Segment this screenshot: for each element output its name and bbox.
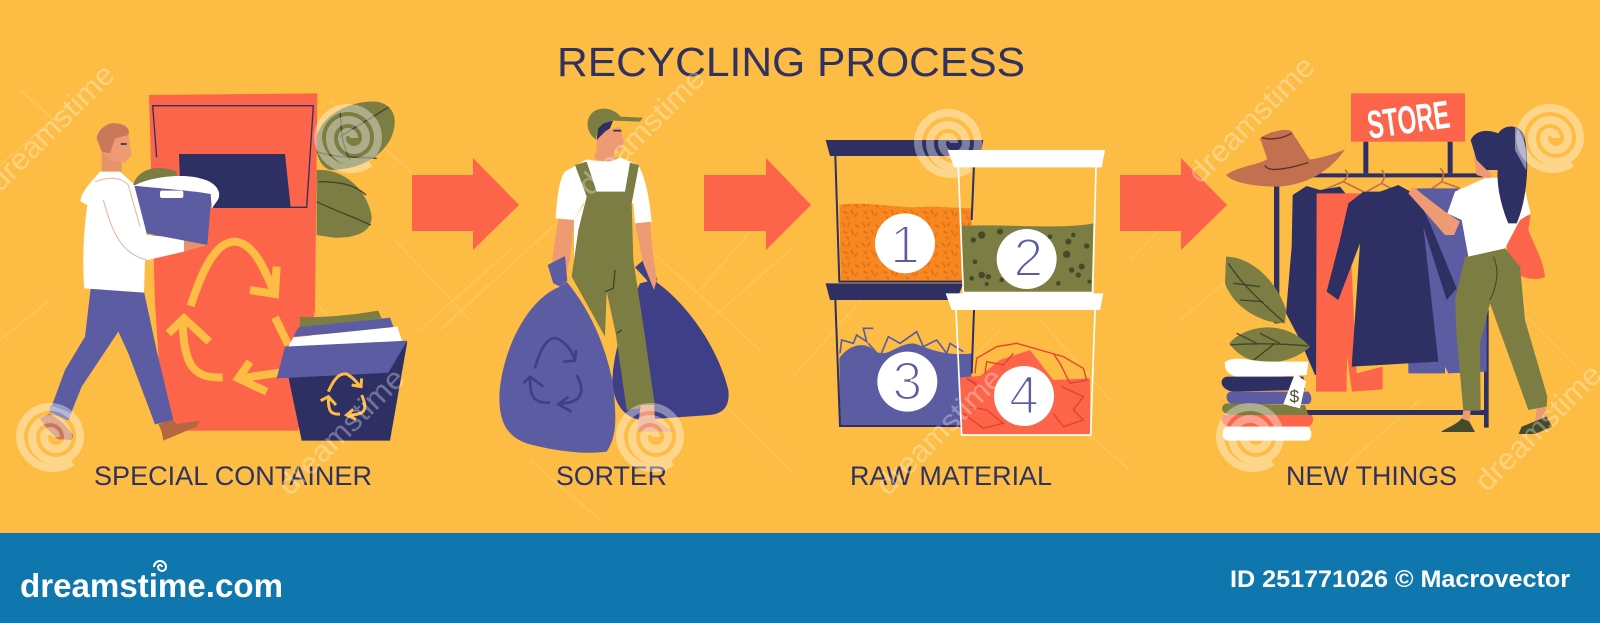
arrow 3: [1120, 158, 1227, 250]
bag recycling symbol: [523, 338, 581, 412]
label: special container: SPECIAL CONTAINER: [94, 461, 372, 491]
recycling bin with clothes: [277, 311, 407, 441]
stack of clothes: $: [1290, 387, 1300, 407]
stack of clothes: [1222, 359, 1313, 441]
container 3: [826, 283, 974, 426]
label: raw material: RAW MATERIAL: [850, 461, 1052, 491]
container 3: 3: [892, 352, 922, 411]
footer banner: [0, 533, 1600, 623]
container 1: [826, 140, 983, 282]
panel: raw material: [826, 140, 1105, 435]
sorter worker: [552, 109, 673, 432]
watermarks: dreamstime: [272, 362, 412, 502]
label: sorter: SORTER: [556, 461, 667, 491]
title: RECYCLING PROCESS: [557, 39, 1025, 85]
man carrying box: [40, 123, 219, 441]
arrow 1: [412, 158, 519, 250]
container 1: 1: [890, 216, 920, 275]
price tag: [1283, 373, 1306, 408]
label: new things: NEW THINGS: [1286, 461, 1457, 491]
front garbage bag: [499, 256, 615, 453]
plant leaves: [316, 102, 395, 238]
store sign: [1351, 93, 1465, 173]
footer credit: ID 251771026 © Macrovector: [1230, 566, 1570, 593]
panel: new things: [1222, 93, 1552, 441]
store sign: STORE: [1365, 93, 1452, 148]
container 2: [948, 150, 1105, 293]
watermarks: dreamstime: [1182, 50, 1322, 190]
plant: [1225, 257, 1310, 363]
watermarks: dreamstime: [1469, 358, 1600, 498]
container slot: [179, 154, 291, 207]
recycling symbol: [168, 242, 288, 392]
hanging clothes: [1286, 185, 1487, 392]
container door outline: [153, 106, 313, 207]
arrow 2: [704, 158, 811, 250]
container 2: 2: [1013, 229, 1043, 288]
red container: [149, 93, 317, 431]
clothes rack: [1274, 173, 1489, 428]
woman shopping: [1408, 126, 1552, 434]
section labels: [94, 461, 1457, 491]
panel: special container: [40, 93, 407, 441]
container 4: 4: [1009, 366, 1039, 425]
footer logo: dreamstime.com: [20, 567, 283, 604]
container 4: [946, 293, 1103, 435]
watermarks: [0, 50, 1600, 502]
panel: sorter: [499, 109, 729, 453]
bin recycling symbol: [321, 374, 365, 419]
watermarks: dreamstime: [572, 62, 712, 202]
hangers: [1320, 168, 1460, 192]
hat: [1226, 130, 1345, 187]
rear garbage bag: [612, 257, 729, 420]
watermarks: dreamstime: [870, 362, 1010, 502]
